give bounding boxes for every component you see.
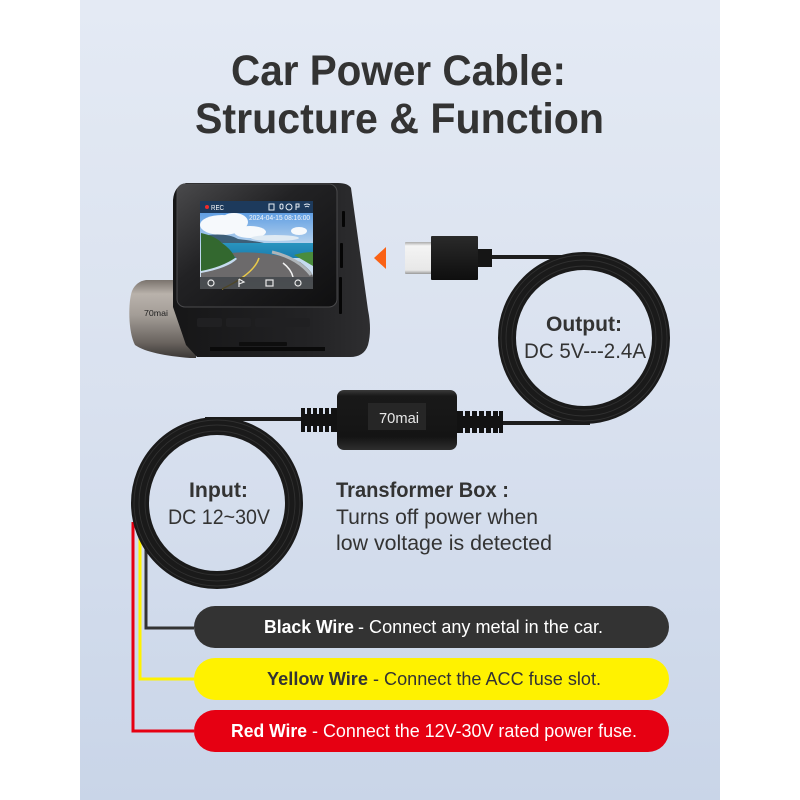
title xyxy=(195,47,604,143)
yellow wire pill: - Connect the ACC fuse slot. xyxy=(373,669,601,689)
coil ring xyxy=(134,420,300,586)
yellow wire pill xyxy=(194,658,669,700)
transformer box description xyxy=(336,479,552,555)
camera lens barrel xyxy=(129,280,196,358)
output label xyxy=(524,313,646,363)
input cable coil xyxy=(134,419,302,586)
screen status bar xyxy=(200,201,313,213)
transformer box description: Turns off power when xyxy=(336,506,538,529)
red wire pill xyxy=(194,710,669,752)
screen timestamp: 2024-04-15 08:16:00 xyxy=(249,215,310,222)
camera bezel xyxy=(177,184,337,307)
right strain relief xyxy=(457,411,503,433)
camera screen xyxy=(200,201,313,289)
colored wires xyxy=(133,522,194,731)
box label xyxy=(368,403,426,430)
screen status icons xyxy=(269,204,310,210)
black wire pill: - Connect any metal in the car. xyxy=(358,617,603,637)
black wire pill xyxy=(194,606,669,648)
yellow wire pill: Yellow Wire xyxy=(267,669,368,689)
coil ring xyxy=(501,255,667,421)
camera body xyxy=(173,183,370,357)
camera lower buttons xyxy=(197,318,310,327)
camera logo: 70mai xyxy=(144,308,168,318)
screen guardrail xyxy=(272,252,311,275)
screen hill left xyxy=(201,233,235,271)
output label: Output: xyxy=(546,313,622,336)
input label: Input: xyxy=(189,479,248,502)
plug metal tip xyxy=(405,242,432,274)
USB-C plug xyxy=(405,236,492,280)
transformer box description: low voltage is detected xyxy=(336,532,552,555)
input label xyxy=(168,479,270,529)
output label: DC 5V---2.4A xyxy=(524,340,646,363)
title: Structure & Function xyxy=(195,95,604,143)
red wire pill: - Connect the 12V-30V rated power fuse. xyxy=(312,721,637,741)
screen rec indicator: REC xyxy=(211,205,224,212)
output cable coil xyxy=(492,255,667,423)
box logo: 70mai xyxy=(379,410,419,427)
screen road edge xyxy=(283,263,293,277)
orange arrow xyxy=(374,247,386,269)
left strain relief xyxy=(301,408,337,432)
background panel xyxy=(80,0,720,800)
screen hill right xyxy=(294,252,313,266)
transformer box description: Transformer Box : xyxy=(336,479,509,502)
title: Car Power Cable: xyxy=(231,47,566,95)
transformer box xyxy=(301,390,503,450)
plug housing xyxy=(431,236,478,280)
dash camera xyxy=(129,183,370,358)
camera side slots xyxy=(339,211,345,314)
box body xyxy=(337,390,457,450)
red wire pill: Red Wire xyxy=(231,721,307,741)
screen road xyxy=(201,252,313,277)
screen clouds xyxy=(200,213,307,241)
screen bottom bar xyxy=(200,277,313,289)
camera vent xyxy=(210,342,325,351)
black wire pill: Black Wire xyxy=(264,617,354,637)
plug neck xyxy=(478,249,492,267)
screen menu icons xyxy=(208,279,301,287)
screen headland xyxy=(208,234,264,243)
screen sea xyxy=(205,243,313,258)
screen road centre line xyxy=(222,258,259,289)
input label: DC 12~30V xyxy=(168,506,270,529)
